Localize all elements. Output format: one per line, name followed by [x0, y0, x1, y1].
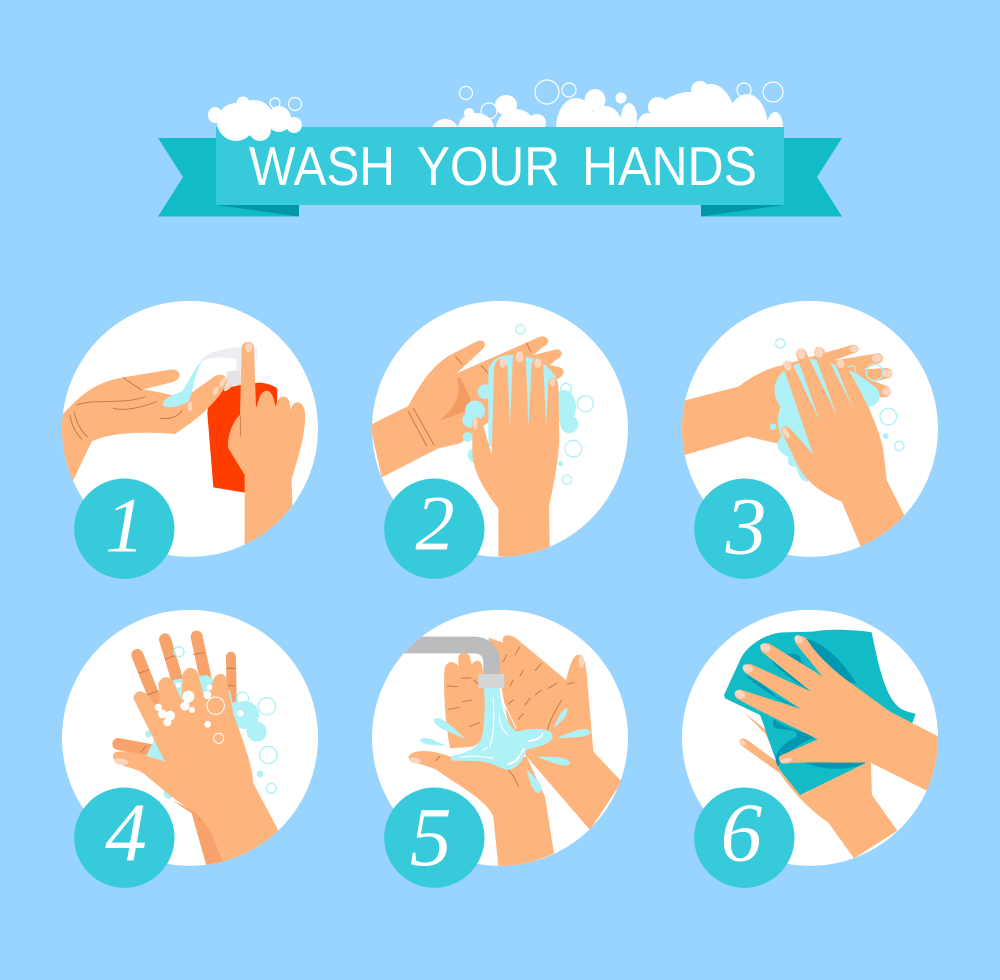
panel: step 2 palm to back of hand — [370, 301, 628, 579]
water highlights — [460, 697, 543, 764]
white circle — [62, 610, 318, 866]
back hand fingers — [118, 637, 232, 750]
white circle — [372, 301, 628, 557]
panel: step 5 rinse under tap — [372, 610, 628, 888]
illustration: hands with towel — [724, 630, 940, 858]
nails of upper hand — [781, 345, 845, 439]
number badge 6 — [694, 787, 794, 888]
white circle — [372, 610, 628, 866]
illustration: hands with soap — [678, 339, 905, 550]
panel: step 1 dispense soap — [57, 301, 318, 579]
lower hand — [739, 712, 897, 858]
panel: step 6 dry with towel — [682, 610, 940, 888]
lower hand — [370, 336, 564, 477]
ribbon band — [216, 127, 784, 205]
right hand — [488, 635, 622, 830]
number badge 3: 3 — [725, 480, 766, 571]
red soap bottle — [207, 383, 277, 493]
number badge 2 — [384, 478, 484, 579]
soap clouds behind the ribbon — [432, 81, 783, 127]
number badge 4 — [74, 787, 174, 888]
illustration: hands under running water — [400, 635, 622, 867]
number badge 2: 2 — [415, 479, 455, 566]
fingernails — [734, 634, 805, 764]
soap stream in palm — [163, 358, 204, 407]
illustration: interlaced hands — [113, 637, 280, 867]
soap foam — [145, 675, 267, 799]
left hand — [57, 369, 227, 480]
soap bubbles — [776, 339, 904, 451]
soap foam — [770, 358, 889, 482]
front hand — [113, 668, 280, 867]
title: HANDS — [582, 135, 757, 197]
left hand palm and wrist — [408, 751, 554, 867]
palm creases — [436, 647, 574, 787]
running water — [451, 688, 553, 770]
lower hand — [678, 345, 893, 455]
number badge 5 — [384, 787, 484, 888]
title: YOUR — [417, 135, 560, 197]
header: title ribbon with soap clouds — [158, 80, 842, 216]
number badge 1 — [74, 478, 174, 579]
left hand fingers — [444, 653, 488, 748]
upper hand — [472, 351, 559, 557]
right hand pressing pump — [228, 342, 305, 557]
white circle — [682, 301, 938, 557]
soap cloud overlapping the ribbon corner — [208, 96, 302, 141]
fingernails — [473, 352, 555, 429]
nails of lower hand — [850, 346, 892, 395]
number badge 1: 1 — [105, 482, 145, 569]
soap bubbles — [174, 647, 277, 793]
ribbon tails — [158, 138, 842, 216]
number badge 6: 6 — [720, 788, 762, 880]
title: WASH — [249, 135, 395, 197]
soap bubbles — [516, 325, 593, 484]
faucet — [400, 645, 504, 688]
white circle — [682, 610, 938, 866]
number badge 4: 4 — [105, 788, 147, 880]
number badge 3 — [694, 478, 794, 579]
fingernails — [188, 377, 233, 412]
panel: step 3 back of hand rub — [678, 301, 938, 579]
number badge 5: 5 — [410, 792, 452, 884]
water splashes — [420, 708, 591, 793]
soap foam — [462, 355, 578, 466]
bubbles above the ribbon — [270, 80, 783, 119]
soap pump — [200, 347, 257, 385]
illustration: hands with soap — [370, 325, 593, 557]
upper hand — [735, 636, 940, 797]
white foam on hand — [155, 682, 244, 728]
illustration: soap bottle and hands — [57, 342, 305, 557]
panel: step 4 between fingers — [62, 610, 318, 888]
towel — [724, 630, 916, 795]
title — [249, 135, 757, 197]
white circle — [62, 301, 318, 557]
upper hand — [781, 347, 905, 550]
towel shadows — [745, 638, 870, 769]
